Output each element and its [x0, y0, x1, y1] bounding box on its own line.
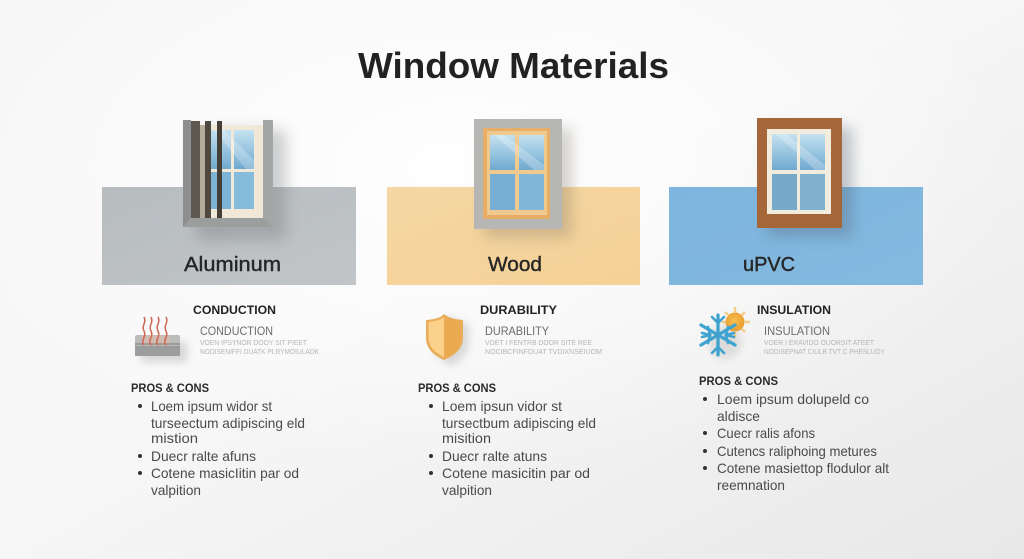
small text: insulation: NODISEPNAT CIULB TVT C PHESLUOY — [764, 349, 885, 356]
list text: Cotene masicIitin par od — [151, 465, 299, 481]
small text: durability — [485, 340, 602, 356]
list text: Loem ipsun vidor st — [442, 398, 562, 414]
bullets — [703, 397, 707, 470]
subheading: conduction: CONDUCTION — [200, 324, 273, 338]
uPVC colour band — [669, 187, 923, 285]
list text: aldisce — [717, 408, 760, 424]
list text: reemnation — [717, 477, 785, 493]
label: uPVC: uPVC — [743, 254, 795, 276]
heading: durability: DURABILITY — [480, 303, 557, 317]
panel: wood — [387, 119, 640, 285]
uPVC window shadow — [767, 127, 853, 237]
list text: Duecr ralte afuns — [151, 448, 256, 464]
bullets — [138, 404, 142, 475]
section: durability — [426, 303, 602, 366]
small text: conduction: VOEN IPSYNOR DOOY SIT PIEET — [200, 340, 308, 347]
small text: insulation — [764, 340, 885, 356]
pros heading: PROS & CONS — [418, 381, 496, 395]
section: insulation — [701, 303, 885, 359]
bullets — [429, 404, 433, 475]
list text: turseectum adipiscing eld — [151, 415, 305, 431]
heading: insulation: INSULATION — [757, 303, 831, 317]
icon: heat block — [135, 317, 187, 362]
small text: durability: VOET I FENTRB DOOR SITE REE — [485, 340, 592, 347]
list text: Cotene masiettop flodulor alt — [717, 460, 889, 476]
panel: aluminum — [102, 120, 356, 285]
list text: Loem ipsum dolupeld co — [717, 391, 869, 407]
icon: wood window — [474, 119, 562, 229]
heading: conduction: CONDUCTION — [193, 303, 276, 317]
list text: Duecr ralte atuns — [442, 448, 547, 464]
list text: Loem ipsum widor st — [151, 398, 272, 414]
pros and cons: aluminum — [131, 381, 305, 498]
small text: conduction: NODISENIFFI DUATK PLRYMOIULADK — [200, 349, 319, 356]
list text: Cuecr ralis afons — [717, 425, 815, 441]
icon: aluminum window — [183, 120, 273, 227]
small text: durability: NOCIBCFINFDUAT TVDIXNSEIUOM — [485, 349, 602, 356]
list text: tursectbum adipiscing eld — [442, 415, 596, 431]
subheading: insulation: INSULATION — [764, 324, 830, 338]
list text: mistion — [151, 430, 198, 446]
subheading: durability: DURABILITY — [485, 324, 549, 338]
small text: insulation: VOER I ERAVIDO OUORSIT ATEET — [764, 340, 875, 347]
wood colour band — [387, 187, 640, 285]
aluminum window shadow — [196, 130, 286, 240]
pros and cons: wood — [418, 381, 596, 498]
wood window shadow — [484, 128, 572, 238]
panel: uPVC — [669, 118, 923, 285]
list text — [442, 398, 596, 498]
icon: snowflake and sun — [701, 307, 750, 359]
list text — [717, 391, 889, 493]
small text: conduction — [200, 340, 319, 356]
icon: shield — [426, 314, 469, 366]
aluminum colour band — [102, 187, 356, 285]
list text: valpition — [151, 482, 201, 498]
list text: Cotene masicitin par od — [442, 465, 590, 481]
list text: valpition — [442, 482, 492, 498]
pros and cons: uPVC — [699, 374, 889, 493]
label: Aluminum: Aluminum — [184, 254, 281, 276]
title: Window Materials — [358, 45, 669, 86]
list text: Cutencs raliphoing metures — [717, 443, 877, 459]
section: conduction — [135, 303, 319, 362]
pros heading: PROS & CONS — [131, 381, 209, 395]
pros heading: PROS & CONS — [699, 374, 778, 388]
list text: misition — [442, 430, 491, 446]
icon: uPVC window — [757, 118, 842, 228]
list text — [151, 398, 305, 498]
label: Wood: Wood — [488, 254, 542, 276]
